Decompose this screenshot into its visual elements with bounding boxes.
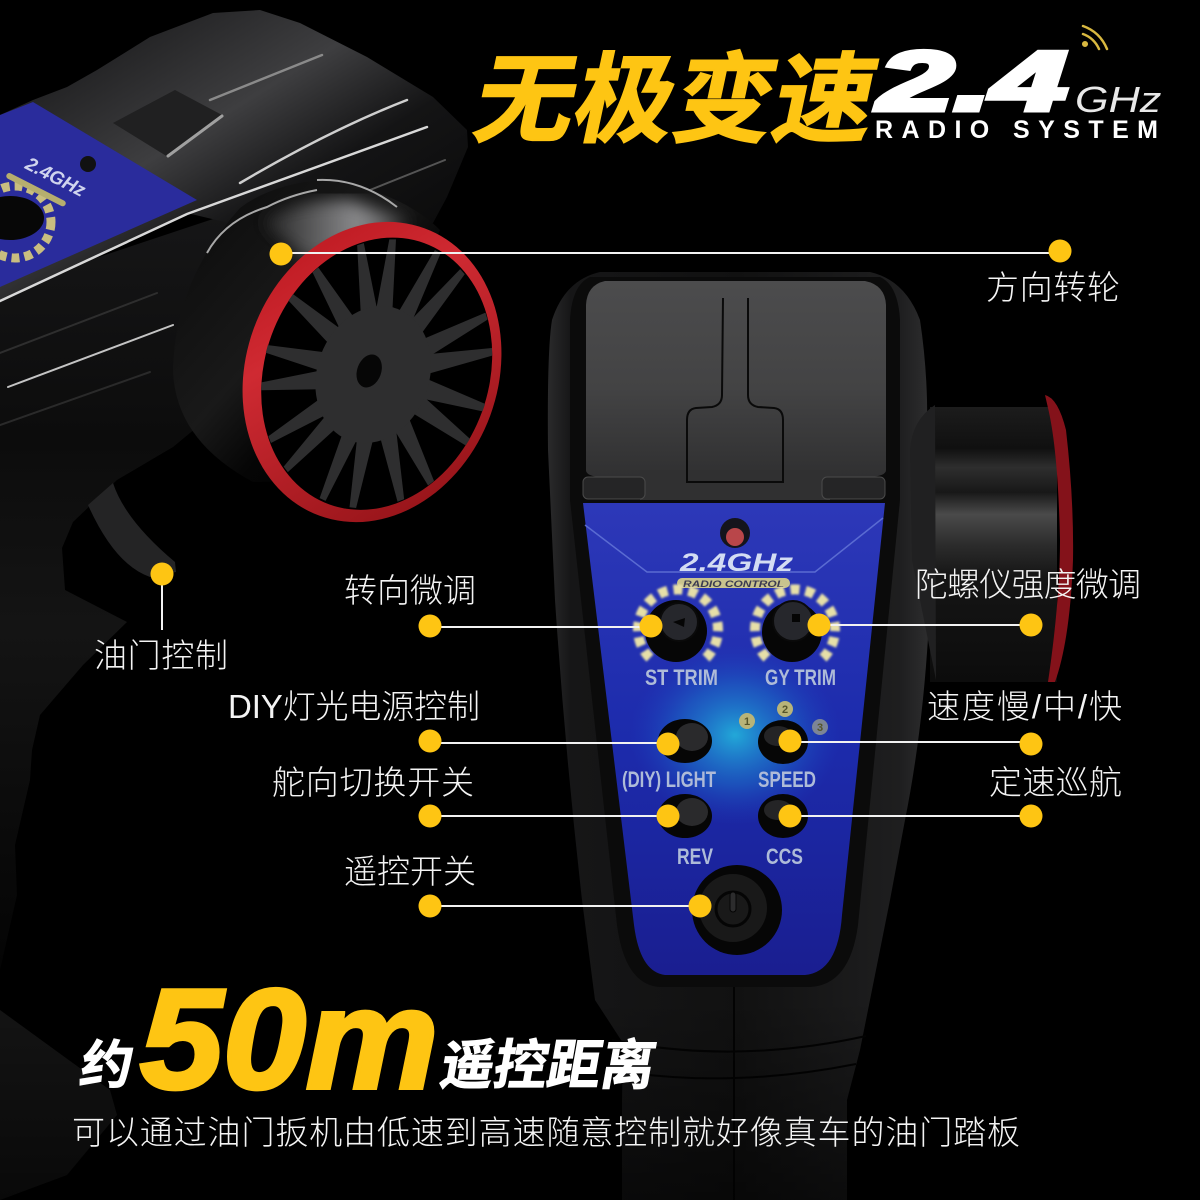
top shell <box>0 10 468 300</box>
switch labels <box>622 767 816 869</box>
range headline <box>76 959 661 1118</box>
callout lines <box>162 253 1060 906</box>
label: power: 遥控开关 <box>344 853 476 890</box>
grip seams <box>612 987 866 1200</box>
label: DIY light: DIY灯光电源控制 <box>228 688 480 725</box>
title <box>465 26 1162 156</box>
steering wheel hub <box>173 180 440 482</box>
highlights on body <box>0 55 445 425</box>
axle hole <box>352 351 386 391</box>
left angled transmitter <box>0 10 543 1200</box>
front body <box>548 272 930 1200</box>
range prefix: 约 <box>76 1037 138 1095</box>
description: 可以通过油门扳机由低速到高速随意控制就好像真车的油门踏板 <box>72 1114 1020 1151</box>
power button <box>692 865 782 955</box>
label: throttle: 油门控制 <box>94 637 228 674</box>
switch labels: (DIY) LIGHT <box>622 767 716 792</box>
speed markers: 3 <box>817 722 823 734</box>
side bump <box>910 405 936 680</box>
battery cover <box>586 281 886 477</box>
switch labels: REV <box>677 844 713 869</box>
inner bezel <box>570 277 900 987</box>
left body and grip <box>0 210 300 970</box>
speed switch <box>758 720 808 764</box>
battery lid square <box>113 90 222 157</box>
spokes <box>224 206 529 541</box>
hub highlight <box>262 200 410 262</box>
lower base <box>0 1010 117 1200</box>
hinges <box>583 477 885 499</box>
ST trim knob <box>638 589 718 662</box>
angled panel logo: 2.4GHz <box>21 153 89 202</box>
label: gyro trim: 陀螺仪强度微调 <box>915 566 1141 603</box>
range suffix: 遥控距离 <box>436 1035 661 1096</box>
range number: 50m <box>140 959 438 1118</box>
panel logo <box>677 549 794 590</box>
callout labels <box>94 269 1141 890</box>
panel logo: 2.4GHz <box>679 549 794 577</box>
blue angled panel <box>0 102 197 287</box>
ccs switch <box>758 794 808 838</box>
angled panel knob <box>0 186 51 258</box>
title radio system: RADIO SYSTEM <box>875 116 1158 144</box>
GY trim knob <box>755 589 835 662</box>
steering wheel <box>201 185 543 559</box>
trim labels <box>645 665 836 690</box>
speed markers <box>739 701 828 735</box>
light switch <box>658 719 712 763</box>
switch labels: CCS <box>766 844 803 869</box>
side wheel red rim <box>1045 395 1073 682</box>
side wheel cylinder <box>930 407 1057 682</box>
bottom fade <box>0 1000 1200 1200</box>
panel glow <box>630 645 840 825</box>
title 2.4: 2.4 <box>876 34 1067 128</box>
rev switch <box>658 794 712 838</box>
throttle trigger <box>88 483 176 577</box>
blue panel <box>583 503 885 975</box>
label: speed: 速度慢/中/快 <box>927 688 1122 725</box>
angled panel logo <box>5 153 96 207</box>
switch labels: SPEED <box>758 767 816 792</box>
trim labels: ST TRIM <box>645 665 718 690</box>
hub arcs <box>207 180 397 253</box>
panel chevron <box>585 518 883 572</box>
title chinese: 无极变速 <box>465 46 887 156</box>
trim labels: GY TRIM <box>765 665 836 690</box>
panel logo: RADIO CONTROL <box>683 579 784 590</box>
title GHz: GHz <box>1075 80 1162 120</box>
speed markers: 1 <box>744 716 750 728</box>
icon: signal arcs <box>1083 26 1107 49</box>
label: steering wheel: 方向转轮 <box>986 269 1120 306</box>
cover lower <box>640 470 830 500</box>
label: reverse: 舵向切换开关 <box>272 764 474 801</box>
label: cruise: 定速巡航 <box>989 764 1122 801</box>
label: steering trim: 转向微调 <box>344 572 476 609</box>
speed markers: 2 <box>782 704 788 716</box>
status led <box>720 518 750 548</box>
cover latch outline <box>687 298 783 482</box>
wheel interior <box>224 205 529 543</box>
front transmitter <box>548 272 1073 1200</box>
callout dots <box>150 240 1072 918</box>
wheel centre <box>297 290 450 459</box>
side wheel <box>930 395 1073 682</box>
red rim <box>201 185 543 559</box>
